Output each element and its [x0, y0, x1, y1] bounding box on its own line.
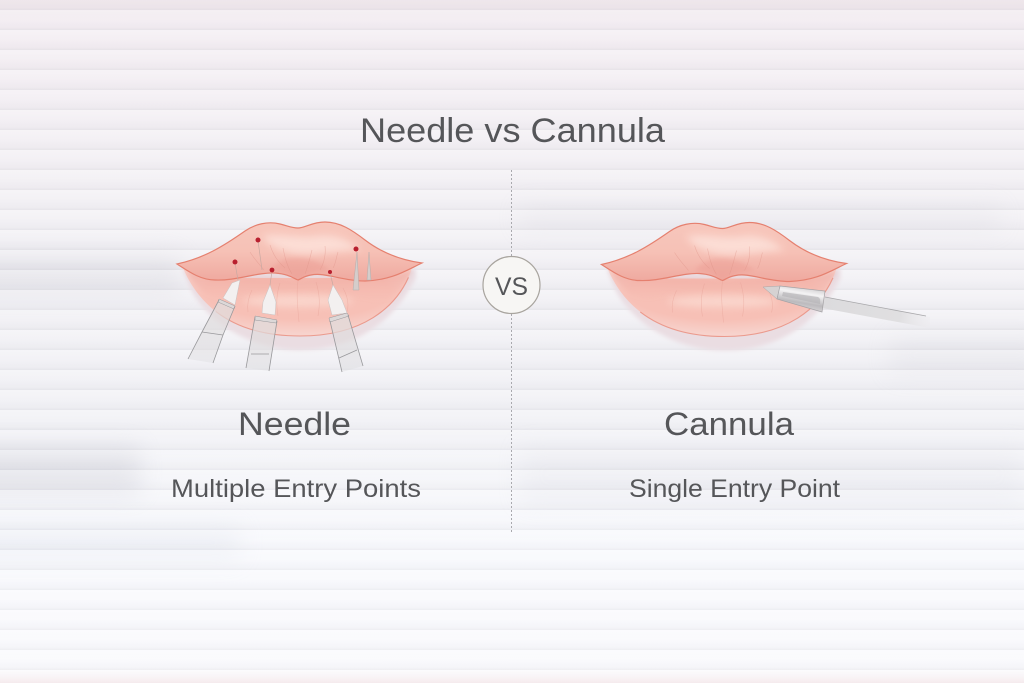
small needle 2: [367, 252, 371, 280]
text: multiple entry points: Multiple Entry Points: [171, 475, 421, 503]
small needle 1: [353, 252, 359, 290]
text: single entry point: Single Entry Point: [629, 475, 840, 503]
syringe 3: [328, 285, 363, 372]
syringe 2: [246, 285, 277, 371]
icon: needle entry points: [188, 238, 371, 372]
title: Needle vs Cannula: [360, 112, 665, 150]
vs badge: [483, 256, 540, 314]
vs badge: VS: [495, 273, 528, 301]
heading: needle: Needle: [238, 406, 351, 442]
lips: needle side: [177, 222, 422, 350]
icon: cannula: [763, 286, 930, 328]
syringe 1: [188, 280, 240, 363]
center divider: [510, 170, 512, 533]
heading: cannula: Cannula: [664, 406, 794, 442]
lips: cannula side: [602, 222, 846, 350]
panel: needle illustration: [177, 222, 422, 372]
panel: cannula illustration: [602, 222, 930, 350]
